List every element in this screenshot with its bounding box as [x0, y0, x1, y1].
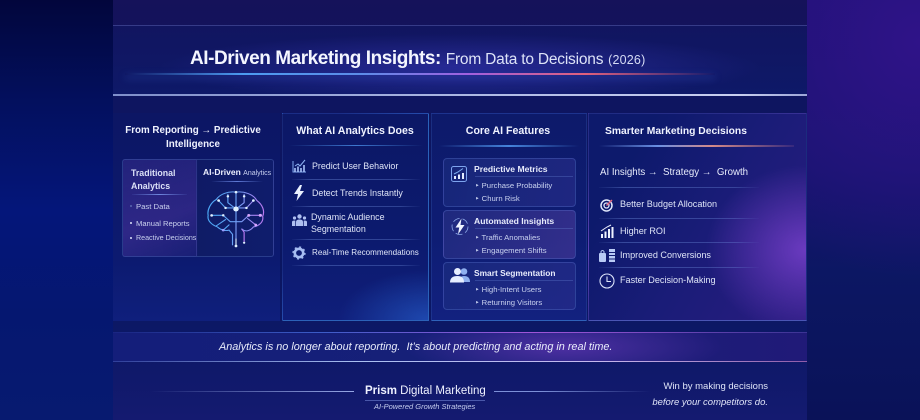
traditional heading	[131, 168, 175, 191]
list item: dynamic audience segmentation	[311, 212, 385, 234]
card list: ‣ High-Intent Users	[475, 285, 542, 294]
list item: detect trends instantly: Detect Trends Instantly	[312, 188, 403, 198]
card list: ‣ Returning Visitors	[475, 298, 542, 306]
list item: dynamic audience segmentation: Dynamic Audience	[311, 212, 385, 222]
panel heading: From Reporting → Predictive	[125, 125, 261, 136]
list item: real-time recommendations: Real-Time Recommendations	[312, 248, 419, 257]
ai-driven heading: AI-Driven Analytics	[203, 167, 271, 177]
background: right side band	[807, 0, 920, 420]
panel: from reporting to predictive intelligence	[113, 113, 280, 321]
card list	[475, 233, 547, 254]
footer slogan: before your competitors do.	[652, 397, 768, 408]
card heading: Smart Segmentation	[474, 268, 555, 278]
traditional list: Past Data	[136, 202, 170, 211]
card list	[475, 181, 552, 202]
icon: lightning circle	[452, 218, 468, 235]
decision: faster decision-making: Faster Decision-Making	[620, 275, 716, 285]
card list: ‣ Engagement Shifts	[475, 246, 547, 254]
icon: circuit brain	[207, 190, 264, 248]
footer slogan: Win by making decisions	[663, 381, 768, 392]
icon: lightning	[294, 185, 304, 201]
list item: predict user behavior: Predict User Behavior	[312, 161, 398, 171]
decision: higher roi: Higher ROI	[620, 226, 665, 236]
icon: metrics chart	[451, 166, 467, 182]
card list	[475, 285, 542, 306]
icon: people	[292, 214, 307, 226]
icon: chart	[292, 160, 306, 172]
comparison box	[122, 159, 274, 257]
traditional list: Manual Reports	[136, 219, 190, 228]
background: left side band	[0, 0, 113, 420]
card: predictive metrics	[443, 158, 576, 207]
icon: rising bars	[600, 224, 614, 238]
traditional list	[130, 202, 196, 242]
traditional heading: Analytics	[131, 180, 170, 190]
icon: clock	[599, 274, 615, 288]
brand line right	[494, 391, 540, 392]
panel: what ai analytics does	[282, 113, 429, 321]
icon: target	[600, 199, 613, 212]
card list: ‣ Purchase Probability	[475, 181, 552, 190]
traditional list: Reactive Decisions	[136, 234, 196, 242]
icon: users	[450, 268, 470, 282]
footer line extension	[540, 391, 650, 392]
footer brand	[162, 385, 540, 411]
footer slogan	[652, 381, 768, 408]
traditional analytics column	[123, 160, 197, 256]
background: centre panel	[113, 0, 807, 420]
card heading: Automated Insights	[474, 216, 554, 226]
traditional heading: Traditional	[131, 168, 175, 178]
panel: core ai features	[431, 113, 587, 321]
tagline text: Analytics is no longer about reporting. It’s about predicting and acting in real time.	[219, 341, 612, 353]
insights flow: AI Insights → Strategy → Growth	[600, 167, 748, 178]
card list: ‣ Traffic Anomalies	[475, 233, 540, 242]
list item: dynamic audience segmentation: Segmentation	[311, 224, 366, 234]
panel heading: Core AI Features	[466, 125, 550, 137]
panel heading: What AI Analytics Does	[296, 125, 414, 137]
brand line left	[150, 391, 354, 392]
card heading: Predictive Metrics	[474, 164, 548, 174]
card: automated insights	[443, 210, 576, 259]
card list: ‣ Churn Risk	[475, 194, 520, 202]
brand tagline: AI-Powered Growth Strategies	[374, 402, 475, 411]
decision: improved conversions: Improved Conversions	[620, 250, 711, 260]
panel heading: Intelligence	[166, 138, 220, 150]
panel: smarter marketing decisions	[588, 113, 807, 321]
card: smart segmentation	[443, 262, 576, 310]
decision: better budget allocation: Better Budget Allocation	[620, 199, 717, 209]
panel heading: Smarter Marketing Decisions	[605, 126, 747, 137]
title band	[113, 26, 807, 95]
panel heading	[125, 125, 261, 150]
icon: bag and stack	[599, 249, 615, 262]
icon: gear	[292, 246, 306, 260]
title glow line	[125, 73, 715, 75]
tagline band	[113, 332, 807, 362]
title: AI-Driven Marketing Insights: From Data to Decisions (2026)	[190, 48, 645, 69]
brand name: Prism Digital Marketing	[365, 385, 486, 397]
